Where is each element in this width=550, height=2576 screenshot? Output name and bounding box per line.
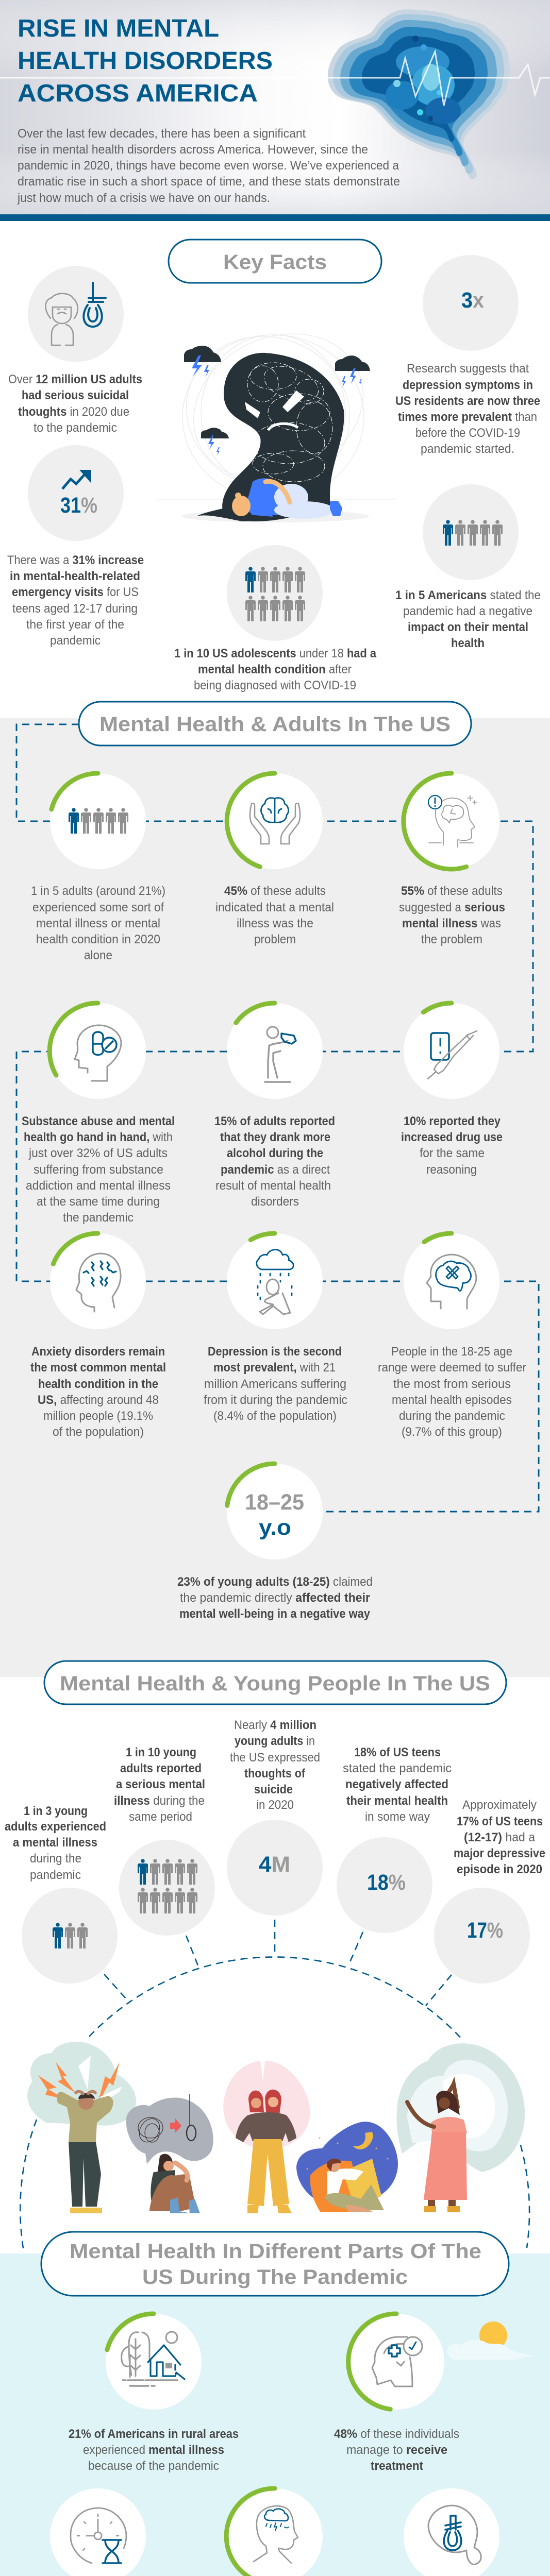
text: 1 in 5: pandemic had a negative: [403, 604, 532, 618]
text: that they drank more: [220, 1130, 330, 1144]
text: 31% increase: in mental-health-related: [10, 569, 140, 583]
text: increased drug use: [401, 1130, 503, 1144]
text: [378, 1345, 526, 1439]
text: 1 in 10: 1 in 10 US adolescents under 18 had a: [174, 647, 377, 660]
text: 31% increase: emergency visits for US: [12, 585, 139, 599]
text: young adults in: [235, 1734, 315, 1748]
text: [22, 1114, 175, 1225]
heading pill: young people: Mental Health & Young People In The US: [60, 1672, 490, 1695]
icon: man and noose: [28, 266, 124, 362]
title: HEALTH DISORDERS: [18, 47, 273, 75]
card: 45% adults: [215, 773, 334, 946]
text: 21% of Americans in rural areas: [69, 2427, 239, 2441]
card: 1 in 3 young adults: [5, 1804, 118, 1984]
text: mental illness was: [402, 917, 501, 930]
text: 1 in 10 young: [126, 1745, 196, 1759]
text: in some way: [365, 1810, 430, 1824]
text: Nearly 4 million: [234, 1718, 316, 1732]
pictogram: 1 in 3: [22, 1888, 118, 1984]
text: experienced mental illness: [83, 2443, 224, 2457]
text: the pandemic: [63, 1211, 134, 1225]
pictogram: 1 in 10: [227, 545, 323, 641]
icon: head with rain cloud with 53% arc: [226, 2488, 323, 2576]
card: 1 in 5 Americans: [395, 484, 541, 650]
text: 3x: times more prevalent than: [398, 410, 537, 424]
icon: head with brain and alert with 55% arc: [404, 773, 499, 869]
text: [177, 1575, 373, 1621]
stat circle: 18-25 y.o with 23% arc: 18–25: [245, 1490, 304, 1515]
text: 18% of US teens: [354, 1745, 441, 1759]
text: 1 in 10: mental health condition after: [198, 663, 352, 676]
pictogram: 1 in 10: [119, 1840, 215, 1936]
text: (9.7% of this group): [402, 1425, 502, 1439]
intro paragraph: dramatic rise in such a short space of time, and these stats demonstrate: [18, 175, 400, 189]
text: US, affecting around 48: [38, 1393, 159, 1407]
text: 23% of young adults (18-25) claimed: [177, 1575, 373, 1589]
card: 21% adults: [31, 773, 165, 962]
card: 31 percent: [7, 445, 144, 648]
text: 55% of these adults: [401, 884, 503, 898]
text: because of the pandemic: [88, 2459, 219, 2473]
intro paragraph: [17, 127, 400, 205]
pictogram: 1 in 5: [423, 484, 519, 580]
title: [18, 15, 273, 107]
text: [230, 1718, 320, 1812]
text: mental illness or mental: [36, 917, 160, 930]
header blue band: [0, 214, 550, 221]
section: mental health and adults: [0, 702, 550, 1677]
figure: woman with two faces: [223, 2061, 310, 2213]
text: 12 million: [8, 372, 142, 435]
text: most prevalent, with 21: [213, 1361, 336, 1375]
text: a serious mental: [116, 1777, 205, 1791]
text: stated the pandemic: [343, 1761, 452, 1775]
text: the pandemic directly affected their: [180, 1591, 370, 1605]
text: 1 in 10: being diagnosed with COVID-19: [194, 679, 356, 692]
text: addiction and mental illness: [26, 1179, 171, 1193]
text: 12 million: to the pandemic: [34, 421, 117, 435]
text: [399, 884, 505, 946]
text: health condition in the: [38, 1377, 158, 1391]
text: 45% of these adults: [224, 884, 326, 898]
card: 1 in 10 young adults: [114, 1745, 215, 1936]
icon: clock with hourglass: [50, 2488, 146, 2576]
ECG heartbeat line: [0, 52, 550, 106]
text: thoughts of: [244, 1767, 306, 1781]
card: 53% rural adults: [217, 2488, 333, 2576]
card: 15% alcohol: [214, 1003, 335, 1209]
card: 21% rural: [69, 2314, 239, 2473]
text: during the pandemic: [399, 1409, 505, 1423]
text: [69, 2427, 239, 2473]
figure: woman in swirl: [396, 2043, 525, 2212]
text: 31% increase: There was a 31% increase: [7, 553, 144, 567]
text: 3x: Research suggests that: [407, 362, 529, 376]
stat circle: 17%: 17%: [467, 1918, 503, 1943]
text: health condition in 2020: [36, 933, 160, 946]
text: range were deemed to suffer: [378, 1361, 526, 1375]
text: [31, 884, 165, 962]
text: 31% increase: pandemic: [50, 634, 101, 648]
text: problem: [254, 933, 296, 946]
stat circle: 18-25 y.o with 23% arc: y.o: [259, 1515, 291, 1540]
text: manage to receive: [346, 2443, 447, 2457]
card: young people suicide risk: [395, 2488, 509, 2576]
text: 1 in 5: 1 in 5 Americans stated the: [395, 588, 541, 602]
stat circle: 18-25 y.o with 23% arc: [227, 1464, 323, 1560]
icon: head with bandaged brain with 10% arc: [404, 1233, 499, 1329]
stat circle: 31% with arrow: [28, 445, 124, 541]
section: key facts: [7, 240, 541, 692]
text: result of mental health: [215, 1179, 331, 1193]
intro paragraph: rise in mental health disorders across America. However, since the: [18, 143, 368, 157]
text: 10% reported they: [404, 1114, 501, 1128]
card: 17% teens: [434, 1798, 545, 1984]
text: illness during the: [114, 1794, 205, 1808]
text: [343, 1745, 452, 1824]
text: 12 million: had serious suicidal: [22, 388, 129, 402]
stat circle: 31% with arrow: 31%: [60, 493, 97, 518]
text: 31% increase: the first year of the: [26, 618, 124, 632]
card: anxiety: [30, 1233, 166, 1439]
section: mental health and young people: [5, 1661, 545, 2251]
text: [334, 2427, 459, 2473]
card: substance abuse: [22, 1003, 175, 1225]
icon: rain cloud and hunched person with 8% arc: [227, 1233, 323, 1329]
illustration: five stressed people: [27, 2042, 525, 2213]
card: 48% treatment: [334, 2314, 459, 2473]
storm clouds: [184, 346, 370, 438]
text: (8.4% of the population): [213, 1409, 337, 1423]
text: 1 in 5: [395, 588, 541, 650]
figure: man on pillows under night sky: [296, 2122, 398, 2212]
stat circle: 18%: 18%: [367, 1870, 406, 1895]
text: suicide: [254, 1783, 293, 1797]
text: Depression is the second: [208, 1345, 342, 1359]
text: [30, 1345, 166, 1439]
text: mental well-being in a negative way: [179, 1607, 371, 1621]
icon: 1 in 5 pictogram with 21% arc: [50, 773, 146, 869]
decoration: sun and cloud: [447, 2321, 533, 2360]
icon: person drinking with 15% arc: [227, 1003, 323, 1099]
stat circle: 4M: 4M: [259, 1852, 290, 1877]
text: alone: [84, 948, 112, 962]
intro paragraph: just how much of a crisis we have on our hands.: [17, 191, 270, 205]
text: Approximately: [462, 1798, 537, 1812]
card: 18% teens: [337, 1745, 452, 1933]
text: same period: [129, 1810, 192, 1824]
stat circle: 3x: [423, 255, 519, 351]
text: their mental health: [346, 1794, 448, 1808]
text: pandemic as a direct: [221, 1163, 330, 1177]
text: 31% increase: teens aged 12-17 during: [12, 602, 138, 616]
stat circle: 3x: 3x: [461, 288, 484, 313]
text: Anxiety disorders remain: [31, 1345, 165, 1359]
text: adults reported: [120, 1761, 202, 1775]
text: 1 in 5: health: [451, 636, 485, 650]
card: 10% drugs: [401, 1003, 503, 1177]
icon: noose in speech bubble: [404, 2488, 499, 2576]
text: 15% of adults reported: [214, 1114, 335, 1128]
dashed connector: [16, 724, 539, 1512]
card: suicidal thoughts: [8, 266, 142, 435]
text: [214, 1114, 335, 1209]
text: of the population): [53, 1425, 144, 1439]
dashed arch connectors: [20, 1920, 529, 2251]
text: [401, 1114, 503, 1177]
figure: stressed man: [27, 2042, 136, 2213]
figure: sitting woman with grey thought bubble: [126, 2094, 213, 2213]
text: disorders: [251, 1195, 299, 1209]
text: 1 in 5: impact on their mental: [408, 620, 528, 634]
text: in 2020: [256, 1798, 294, 1812]
stat circle: 18%: [337, 1837, 432, 1933]
card: twice as long: [25, 2488, 172, 2576]
text: 12 million: thoughts in 2020 due: [18, 405, 129, 419]
text: indicated that a mental: [215, 901, 334, 914]
icon: house with trees with 21% arc: [106, 2314, 202, 2410]
text: just over 32% of US adults: [28, 1146, 168, 1160]
title: ACROSS AMERICA: [18, 80, 258, 107]
text: 1 in 3 young: [24, 1804, 88, 1818]
text: million people (19.1%: [43, 1409, 153, 1423]
card: 55% adults: [399, 773, 505, 946]
heading pill: adults: Mental Health & Adults In The US: [99, 713, 451, 736]
text: [215, 884, 334, 946]
icon: hands holding brain with 45% arc: [227, 773, 323, 869]
text: adults experienced: [5, 1820, 106, 1834]
text: 31% increase: [7, 553, 144, 648]
text: experienced some sort of: [32, 901, 164, 914]
text: suffering from substance: [34, 1163, 163, 1177]
text: [5, 1804, 106, 1882]
text: million Americans suffering: [204, 1377, 346, 1391]
header gradient background: [0, 0, 550, 215]
heading pill: different parts: Mental Health In Different Parts Of The: [70, 2240, 481, 2263]
heading pill: young people: [44, 1661, 506, 1704]
text: 1 in 5 adults (around 21%): [31, 884, 165, 898]
text: [454, 1798, 545, 1876]
text: 3x: [395, 362, 540, 456]
icon: head with cross and check with 48% arc: [348, 2314, 444, 2410]
text: episode in 2020: [457, 1862, 542, 1876]
header panel: [0, 0, 550, 221]
card: depression: [204, 1233, 347, 1423]
card: 4 million: [227, 1718, 323, 1916]
stat circle: 4M: [227, 1820, 323, 1916]
text: a mental illness: [13, 1836, 97, 1850]
text: 1 in 10: [174, 647, 377, 692]
card: 18-25 young adults: [177, 1464, 373, 1621]
card: 1 in 10 adolescents: [174, 545, 377, 692]
text: suggested a serious: [399, 901, 505, 914]
stat circle: 17%: [434, 1888, 530, 1984]
panel background light blue: [0, 2253, 550, 2576]
icon: head with anxiety squiggles with 19% arc: [50, 1233, 146, 1329]
text: People in the 18-25 age: [391, 1345, 512, 1359]
text: 3x: before the COVID-19: [415, 426, 520, 440]
text: [114, 1745, 205, 1824]
text: 3x: pandemic started.: [421, 442, 514, 456]
heading pill: different parts: US During The Pandemic: [142, 2266, 408, 2289]
text: Substance abuse and mental: [22, 1114, 175, 1128]
panel background grey: [0, 718, 550, 1677]
icon: phone alert and syringe with 10% arc: [404, 1003, 499, 1099]
intro paragraph: Over the last few decades, there has been a significant: [18, 127, 306, 141]
text: during the: [30, 1852, 81, 1866]
heading pill: Key Facts: Key Facts: [223, 251, 327, 274]
text: (12-17) had a: [464, 1831, 536, 1844]
text: from it during the pandemic: [204, 1393, 347, 1407]
heading pill: adults: [79, 702, 471, 745]
text: 3x: depression symptoms in: [403, 378, 533, 392]
text: the most from serious: [393, 1377, 511, 1391]
heading pill: Key Facts: [169, 240, 381, 283]
text: [204, 1345, 347, 1423]
text: mental health episodes: [392, 1393, 512, 1407]
text: illness was the: [237, 917, 313, 930]
text: pandemic: [30, 1868, 81, 1882]
card: 18-25 serious: [378, 1233, 526, 1439]
text: for the same: [420, 1146, 485, 1160]
intro paragraph: pandemic in 2020, things have become even worse. We’ve experienced a: [18, 159, 399, 173]
heading pill: different parts: [41, 2232, 509, 2296]
text: the US expressed: [230, 1751, 320, 1765]
text: negatively affected: [345, 1777, 448, 1791]
illustration: woman under dark hair and storm clouds: [156, 307, 396, 522]
text: 12 million: Over 12 million US adults: [8, 372, 142, 386]
text: the most common mental: [30, 1361, 166, 1375]
text: health go hand in hand, with: [24, 1130, 173, 1144]
title: RISE IN MENTAL: [18, 15, 219, 42]
icon: head with pills with 32% arc: [49, 1003, 146, 1099]
card: 3x depression symptoms: [395, 255, 540, 456]
text: treatment: [371, 2459, 423, 2473]
text: the problem: [421, 933, 482, 946]
text: reasoning: [426, 1163, 477, 1177]
text: at the same time during: [37, 1195, 160, 1209]
text: alcohol during the: [227, 1146, 323, 1160]
illustration: layered paper brain: [328, 9, 510, 179]
section: different parts of the US: [0, 2232, 550, 2576]
text: 48% of these individuals: [334, 2427, 459, 2441]
